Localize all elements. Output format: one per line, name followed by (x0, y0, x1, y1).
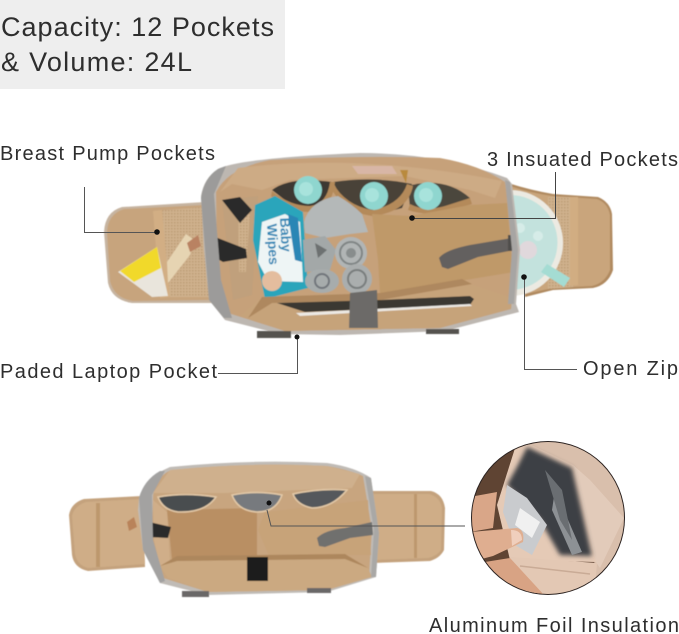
left flap: breast pump pockets (104, 202, 212, 303)
left zip side band (139, 471, 165, 583)
bag body: outer rim (201, 153, 520, 335)
right zip side band (365, 476, 379, 577)
outer rim (138, 462, 379, 595)
interior lining (152, 465, 372, 592)
bag interior: tan lining (216, 157, 513, 331)
heading panel: capacity and volume: & Volume: 24L (1, 47, 192, 77)
right flap (370, 491, 445, 563)
rolled grey clothes (303, 196, 372, 294)
callout: insulated pockets: 3 Insuated Pockets (487, 149, 678, 171)
illustration: open bag with contents (104, 153, 613, 338)
bottom feet (182, 588, 331, 597)
heading panel: capacity and volume (0, 0, 285, 89)
black side tab (145, 521, 171, 538)
bottom feet (257, 329, 459, 338)
left zip side band (201, 166, 232, 318)
baby wipes pack (253, 196, 308, 299)
callout: breast pump pockets: Breast Pump Pockets (0, 143, 215, 165)
black front tab (247, 557, 268, 581)
grey handle strap (317, 522, 373, 547)
callout: insulated pockets (409, 149, 678, 221)
yellow card in pocket (118, 247, 168, 297)
callout: open zip (521, 274, 678, 380)
callout: open zip: Open Zip (583, 358, 678, 380)
grey handle strap (439, 235, 515, 269)
left flap (69, 496, 145, 571)
heading panel: capacity and volume: Capacity: 12 Pockets (1, 12, 274, 42)
right zip side band (505, 180, 518, 304)
black tabs on left side (210, 197, 252, 262)
callout: padded laptop pocket: Paded Laptop Pocket (0, 361, 217, 383)
icon: round teal plate (510, 190, 563, 296)
front grey strap (349, 290, 378, 328)
zip pull (127, 517, 137, 531)
front laptop pocket (240, 279, 512, 331)
detail lens: aluminum foil insulation (470, 440, 630, 600)
insulated pockets with bottles (271, 170, 472, 216)
tan centre pocket (372, 203, 514, 294)
bottom illustration: empty bag with foil pockets (69, 462, 445, 597)
baby wipes pack: Wipes (264, 223, 282, 265)
callout: aluminum foil insulation (266, 500, 679, 634)
foil pockets (158, 490, 347, 512)
callout: breast pump pockets (0, 143, 215, 235)
baby wipes pack: Baby (277, 217, 295, 253)
callout: padded laptop pocket (0, 334, 300, 383)
right flap: open zip pocket (508, 183, 613, 297)
front pocket (160, 556, 372, 592)
